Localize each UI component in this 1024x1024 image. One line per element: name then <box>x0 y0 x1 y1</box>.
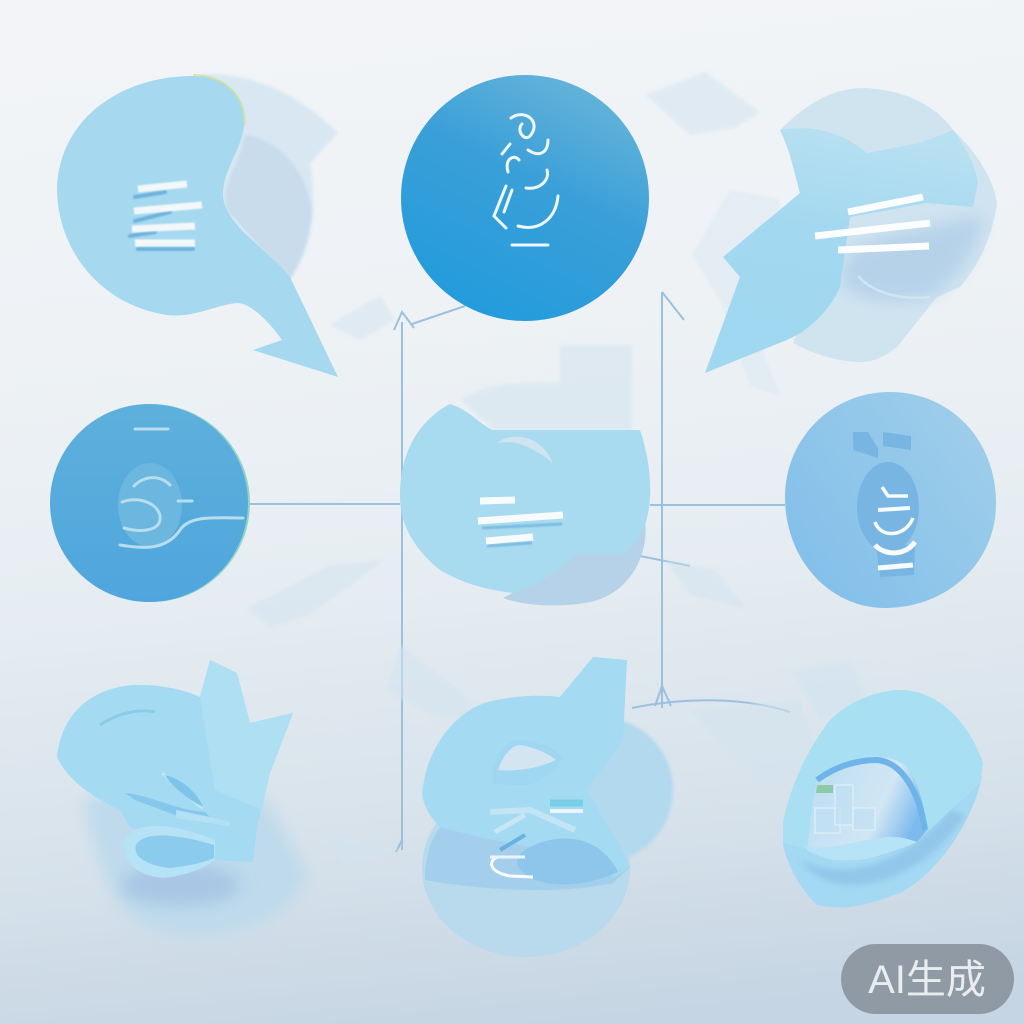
circle <box>785 392 996 608</box>
teal bar <box>550 800 583 806</box>
icon: hole <box>493 740 563 785</box>
right ghost <box>527 717 673 863</box>
panel: top-right speech bubble <box>705 88 997 373</box>
lighter ear <box>200 660 293 810</box>
icon: text lines <box>478 500 563 546</box>
icon: arc <box>497 437 553 463</box>
panel: bottom-center shape <box>422 657 673 957</box>
ghost <box>790 660 870 720</box>
icon: faint glyph <box>120 429 243 547</box>
inner fold <box>225 135 312 280</box>
fold marks <box>100 711 230 826</box>
rainbow edge <box>52 404 250 602</box>
connector lines <box>248 292 790 852</box>
bubble body <box>57 76 338 377</box>
ghost layer <box>780 88 997 362</box>
icon: text lines <box>815 197 930 250</box>
icon: glyph strokes <box>494 115 558 245</box>
lower body <box>783 775 982 908</box>
shape body <box>57 660 293 862</box>
panel: top-left speech bubble <box>57 75 338 377</box>
panel: middle-left circle <box>50 404 250 602</box>
pocket bottom lip <box>803 837 917 860</box>
inner pocket <box>807 757 927 860</box>
icon: glyph strokes <box>490 810 575 877</box>
shape body <box>422 657 630 878</box>
lower band <box>425 827 630 890</box>
icon: glyph <box>853 432 919 577</box>
bubble edge highlight <box>193 75 245 125</box>
upper body <box>783 690 983 860</box>
circle <box>50 404 248 602</box>
badge: AI generated <box>841 944 1014 1014</box>
inner lens <box>118 463 182 547</box>
lower ghost circle <box>422 779 630 957</box>
panel: middle-center bubble <box>400 404 650 605</box>
badge pill <box>841 944 1014 1014</box>
soft lower ghost <box>83 780 307 938</box>
faint ghost shapes <box>247 72 820 865</box>
panel: top-center circle <box>401 75 649 321</box>
fold loop <box>124 826 215 878</box>
panel: middle-right circle <box>785 392 996 608</box>
shadow under flap <box>840 215 985 301</box>
soft shadow <box>120 865 240 905</box>
badge label: AI生成 <box>868 958 986 1002</box>
pocket blue rim <box>817 760 925 830</box>
panel: bottom-left shape <box>57 660 307 938</box>
green tint <box>816 785 833 793</box>
ghost layer behind bubble <box>200 75 338 280</box>
icon: text lines <box>130 184 202 249</box>
shadow <box>800 810 965 885</box>
icon: square glyph <box>815 785 875 833</box>
inner curve <box>858 276 930 298</box>
panel: bottom-right shape <box>783 660 983 908</box>
lower fold <box>503 520 646 605</box>
lower swoosh <box>517 839 618 884</box>
bubble body <box>400 404 650 593</box>
bubble body <box>705 128 978 373</box>
circle <box>401 75 649 321</box>
